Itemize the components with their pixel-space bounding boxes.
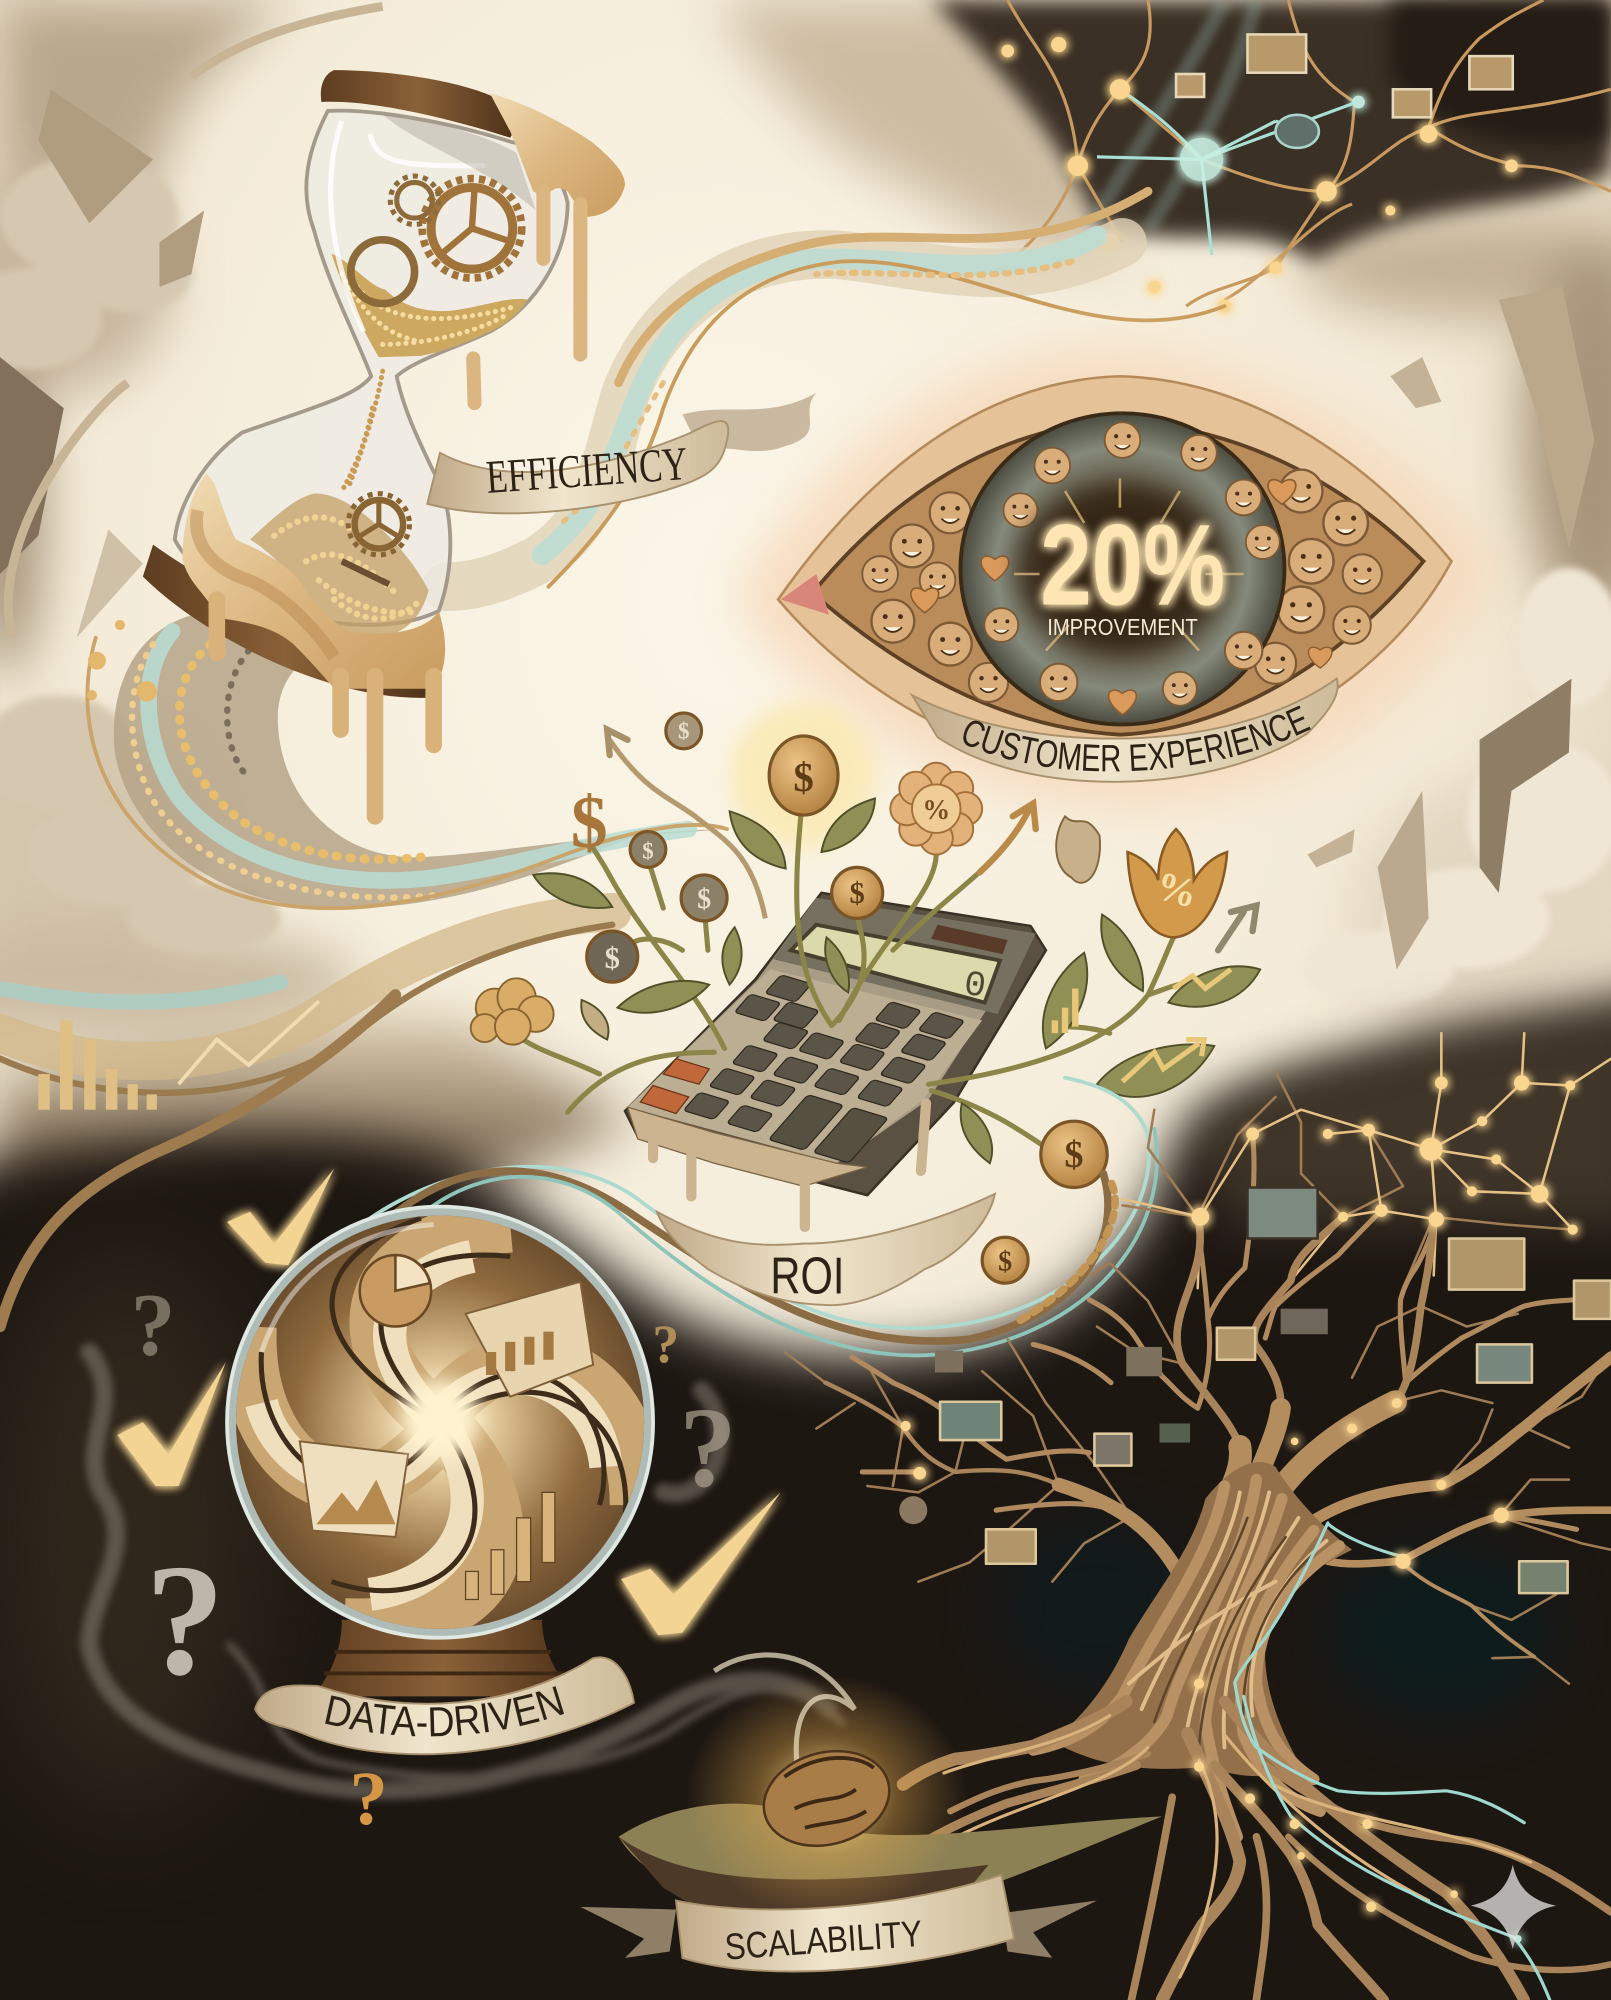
panel: data-driven crystal ball — [77, 1166, 882, 1880]
calculator display digits: 0 — [961, 964, 988, 1007]
rock island — [619, 1804, 1162, 1932]
icon: coins and flowers: $ — [998, 1246, 1012, 1277]
icon: brain — [1276, 115, 1319, 148]
banner text: DATA-DRIVEN — [325, 1686, 564, 1736]
ribbon: teal loop around ROI — [332, 1078, 1157, 1355]
faces in the eye — [862, 470, 1382, 702]
icon: coins and flowers: $ — [605, 941, 620, 975]
banner: Efficiency — [427, 393, 816, 513]
melted gold top — [473, 93, 625, 403]
upper star network — [1122, 1033, 1611, 1288]
line chart doc — [300, 1441, 408, 1537]
glowing network nodes — [1001, 37, 1518, 312]
tree secondary branches — [852, 1134, 1577, 1529]
dashboard tiles on branches — [935, 1188, 1611, 1593]
top wooden cap — [321, 70, 513, 138]
gold bubbles — [87, 620, 157, 702]
seed — [753, 1738, 900, 1859]
calculator face — [628, 898, 1036, 1163]
orb stand — [313, 1620, 574, 1696]
iris faces — [981, 422, 1280, 715]
panel: hourglass — [87, 70, 625, 816]
panel: ROI calculator with money plants — [332, 702, 1260, 1355]
ribbon: data stream lower loop — [87, 612, 727, 909]
growth arrows — [607, 730, 1256, 950]
melted drips on calculator — [628, 1103, 926, 1227]
glass highlight — [331, 121, 485, 332]
calculator body — [625, 893, 1046, 1195]
banner text: EFFICIENCY — [485, 438, 689, 504]
panel: customer experience eye — [724, 320, 1493, 820]
glass body — [175, 111, 568, 625]
flower with percent — [890, 763, 982, 855]
icon: coins and flowers: $ — [697, 884, 711, 915]
panel: top-right dark neural network — [931, 0, 1611, 312]
melted gold bottom — [182, 473, 445, 816]
small dashboards — [1176, 34, 1513, 117]
icon: coins and flowers: $ — [793, 755, 814, 800]
statistic: 20%: 20% — [1040, 502, 1225, 630]
bars on leaf — [1055, 989, 1075, 1033]
left flower — [471, 978, 554, 1045]
icon: coins and flowers: $ — [1064, 1134, 1084, 1176]
statistic label: IMPROVEMENT — [1047, 614, 1198, 640]
golden tulip — [1128, 829, 1227, 938]
icon: large gear — [422, 179, 522, 278]
pie chart doc — [360, 1255, 431, 1327]
coin halo — [730, 702, 878, 849]
tree bark strands — [1033, 1480, 1339, 1837]
banner text: ROI — [770, 1247, 844, 1305]
ribbon: data stream to chart — [0, 912, 612, 1327]
arrow charts on leaves — [1122, 969, 1231, 1082]
icon: checkmarks — [117, 1168, 781, 1635]
pale lily bud — [1056, 816, 1100, 883]
ribbon: data stream from network to hourglass — [446, 191, 1225, 587]
icon: question marks: ? — [145, 1532, 225, 1708]
icon: coins and flowers: $ — [642, 838, 654, 863]
tree fine twigs — [784, 1071, 1611, 1684]
icon: sparkle watermark — [1471, 1865, 1556, 1949]
icon: coins and flowers: % — [922, 795, 950, 826]
plant stems — [523, 814, 1186, 1154]
banner: Scalability — [580, 1875, 1097, 1971]
calculator keyboard plate — [628, 969, 982, 1163]
leaves — [533, 798, 1260, 1163]
iris — [960, 413, 1284, 724]
eye soft glow — [733, 350, 1499, 805]
rising bars — [466, 1492, 555, 1599]
calculator keys — [640, 975, 965, 1163]
tree main limbs — [825, 1217, 1434, 1485]
icon: small gears — [351, 176, 439, 304]
background: dark night ground — [0, 995, 1611, 2000]
banner: ROI — [657, 1194, 995, 1305]
icon: coins and flowers: % — [1151, 863, 1202, 917]
smoke wisps — [89, 1352, 842, 1791]
tree roots — [903, 1702, 1611, 2000]
seed glow — [686, 1675, 967, 1917]
banner: customer experience: CUSTOMER EXPERIENCE — [963, 706, 1311, 772]
banner: Data-Driven — [254, 1656, 635, 1756]
chart: bars at left edge — [38, 1001, 319, 1110]
panel: tree of scalable AI — [784, 1033, 1611, 2000]
sand upper — [332, 254, 528, 357]
iris burst — [1018, 485, 1227, 653]
panel: glowing seed on rock — [580, 1655, 1162, 1971]
calculator screen — [791, 925, 1000, 1003]
icon: question marks: ? — [131, 1276, 175, 1375]
glowing tree nodes — [901, 1075, 1578, 1943]
bar chart doc — [466, 1282, 593, 1397]
banner text: SCALABILITY — [723, 1913, 924, 1968]
icon: question marks: ? — [350, 1756, 388, 1841]
icon: coins and flowers: $ — [571, 782, 608, 864]
background: painterly clouds and swirling sky — [0, 0, 1611, 1059]
glass sphere — [227, 1207, 653, 1638]
icon: question marks: ? — [652, 1314, 679, 1374]
upper and lower eyelid — [778, 376, 1452, 772]
small brain icon — [899, 1496, 927, 1524]
teal data veins in tree — [1235, 1523, 1550, 2000]
banner: customer experience — [910, 677, 1339, 783]
icon: coins and flowers — [471, 713, 1256, 1283]
icon: coins and flowers: $ — [850, 876, 865, 910]
icon: coins and flowers: $ — [678, 719, 689, 744]
swirl of documents — [233, 1213, 647, 1631]
icon: question marks — [131, 1276, 737, 1841]
sand lower — [250, 494, 429, 637]
neural hub node — [1180, 138, 1223, 181]
eye interior — [813, 421, 1423, 735]
swirl centre glow — [399, 1379, 481, 1460]
falling sand — [342, 371, 383, 491]
icon: question marks: ? — [679, 1384, 737, 1511]
tree trunk — [1052, 1462, 1352, 1776]
bottom wooden base — [143, 545, 429, 698]
sphere highlight — [261, 1224, 434, 1352]
rising light wisp — [714, 1655, 855, 1767]
icon: lower gear — [348, 494, 409, 555]
